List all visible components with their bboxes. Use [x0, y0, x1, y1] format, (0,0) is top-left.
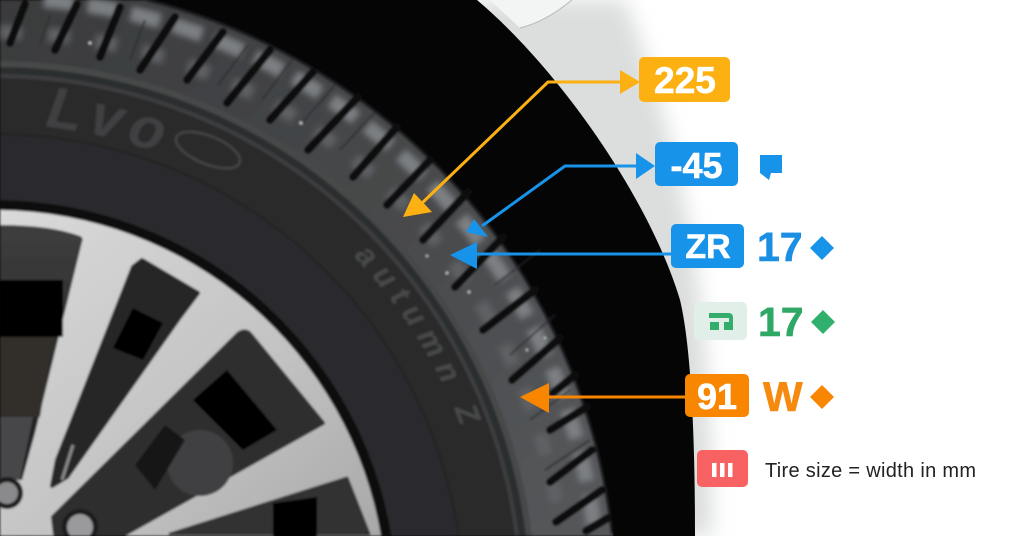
- tread grooves: [10, 4, 608, 531]
- value: green 17: 17: [758, 299, 804, 345]
- label: 225: 225: [654, 60, 716, 101]
- wheel opening 1: [0, 225, 83, 480]
- tire tread: [0, 0, 614, 536]
- label: 91: [685, 374, 749, 417]
- icon: red legend box: [697, 450, 748, 487]
- value: orange W: W: [763, 373, 803, 420]
- icon: green diamond: [811, 310, 835, 334]
- label: -45: [655, 142, 738, 186]
- arrow: -45 blue: [466, 153, 655, 237]
- legend text: Tire size = width in mm: [765, 460, 976, 482]
- label: ZR: ZR: [685, 228, 731, 266]
- wheel opening 4: [170, 478, 369, 536]
- car fender: grey band around wheel arch: [470, 0, 712, 536]
- tire sidewall: [0, 62, 532, 536]
- tread sipes: [40, 15, 590, 470]
- arrow: ZR blue: [450, 242, 672, 269]
- tread specks: [88, 42, 546, 351]
- wheel opening 2: [52, 260, 198, 486]
- wheel opening 3: [53, 332, 323, 534]
- arrow: 225 yellow: [403, 70, 640, 217]
- value: blue 17: 17: [757, 224, 803, 270]
- photo: tire and alloy wheel: [0, 0, 614, 536]
- arrow: 91 orange: [520, 383, 686, 413]
- label: 91: 91: [697, 376, 737, 417]
- alloy wheel: [0, 200, 392, 536]
- label: -45: -45: [670, 145, 723, 186]
- sidewall size lettering: autumn Z: [354, 248, 482, 424]
- label: 225: [639, 57, 730, 102]
- sidewall logo oval: [174, 130, 242, 170]
- wheel well: black arch: [0, 0, 695, 536]
- label: ZR: [671, 224, 744, 268]
- label: green icon box: [694, 302, 747, 340]
- icon: blue diamond: [810, 236, 834, 260]
- lug nut left: [0, 477, 23, 509]
- icon: blue speech bubble: [760, 155, 782, 180]
- sidewall brand lettering: Lvo: [46, 88, 164, 148]
- icon: orange diamond: [810, 385, 834, 409]
- lug nut right: [62, 509, 98, 536]
